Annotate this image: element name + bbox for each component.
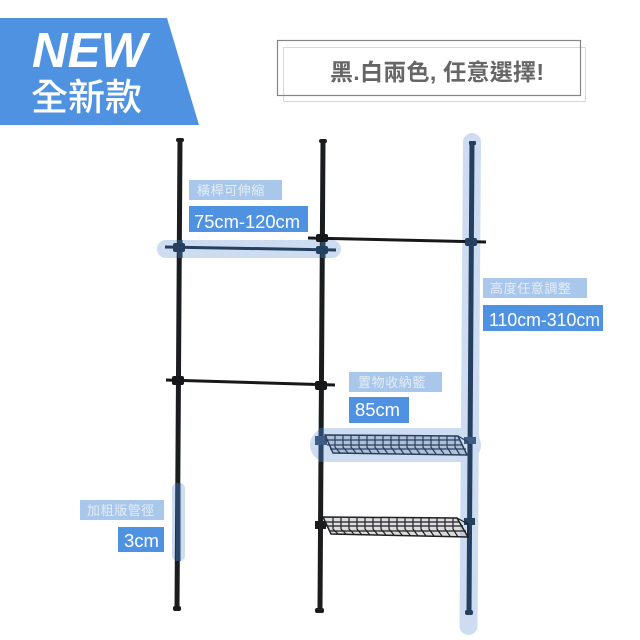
label: pole diameter: [80, 500, 164, 552]
callout: colour choice box: 黑.白兩色, 任意選擇!: [330, 59, 544, 85]
banner: new style: 全新款: [31, 77, 142, 118]
label: height range: 高度任意調整: [490, 281, 572, 296]
basket: upper: [315, 435, 476, 455]
label: height range: 110cm-310cm: [489, 310, 600, 330]
basket: lower: [315, 517, 475, 537]
label: crossbar length: [189, 180, 308, 232]
label: pole diameter: 加粗版管徑: [87, 503, 155, 518]
cross bar: middle left: [166, 376, 335, 390]
cross bar: top right: [308, 234, 486, 246]
callout: colour choice box: [278, 40, 586, 102]
pole: middle: [315, 139, 327, 613]
highlight bands: [157, 142, 481, 626]
rack frame: [157, 138, 486, 626]
pole overlays: [178, 240, 323, 561]
label: storage basket: [349, 372, 442, 423]
banner: new style: NEW: [32, 24, 151, 78]
label: crossbar length: 橫桿可伸縮: [197, 183, 265, 198]
banner: new style: [0, 18, 199, 125]
label: pole diameter: 3cm: [124, 531, 159, 551]
cross bar: top left: [165, 243, 336, 254]
label: storage basket: 置物收納籃: [358, 375, 426, 390]
label: storage basket: 85cm: [355, 400, 400, 420]
pole: left: [173, 138, 184, 611]
label: crossbar length: 75cm-120cm: [194, 212, 300, 232]
pole: right: [465, 141, 476, 615]
label: height range: [483, 278, 603, 331]
